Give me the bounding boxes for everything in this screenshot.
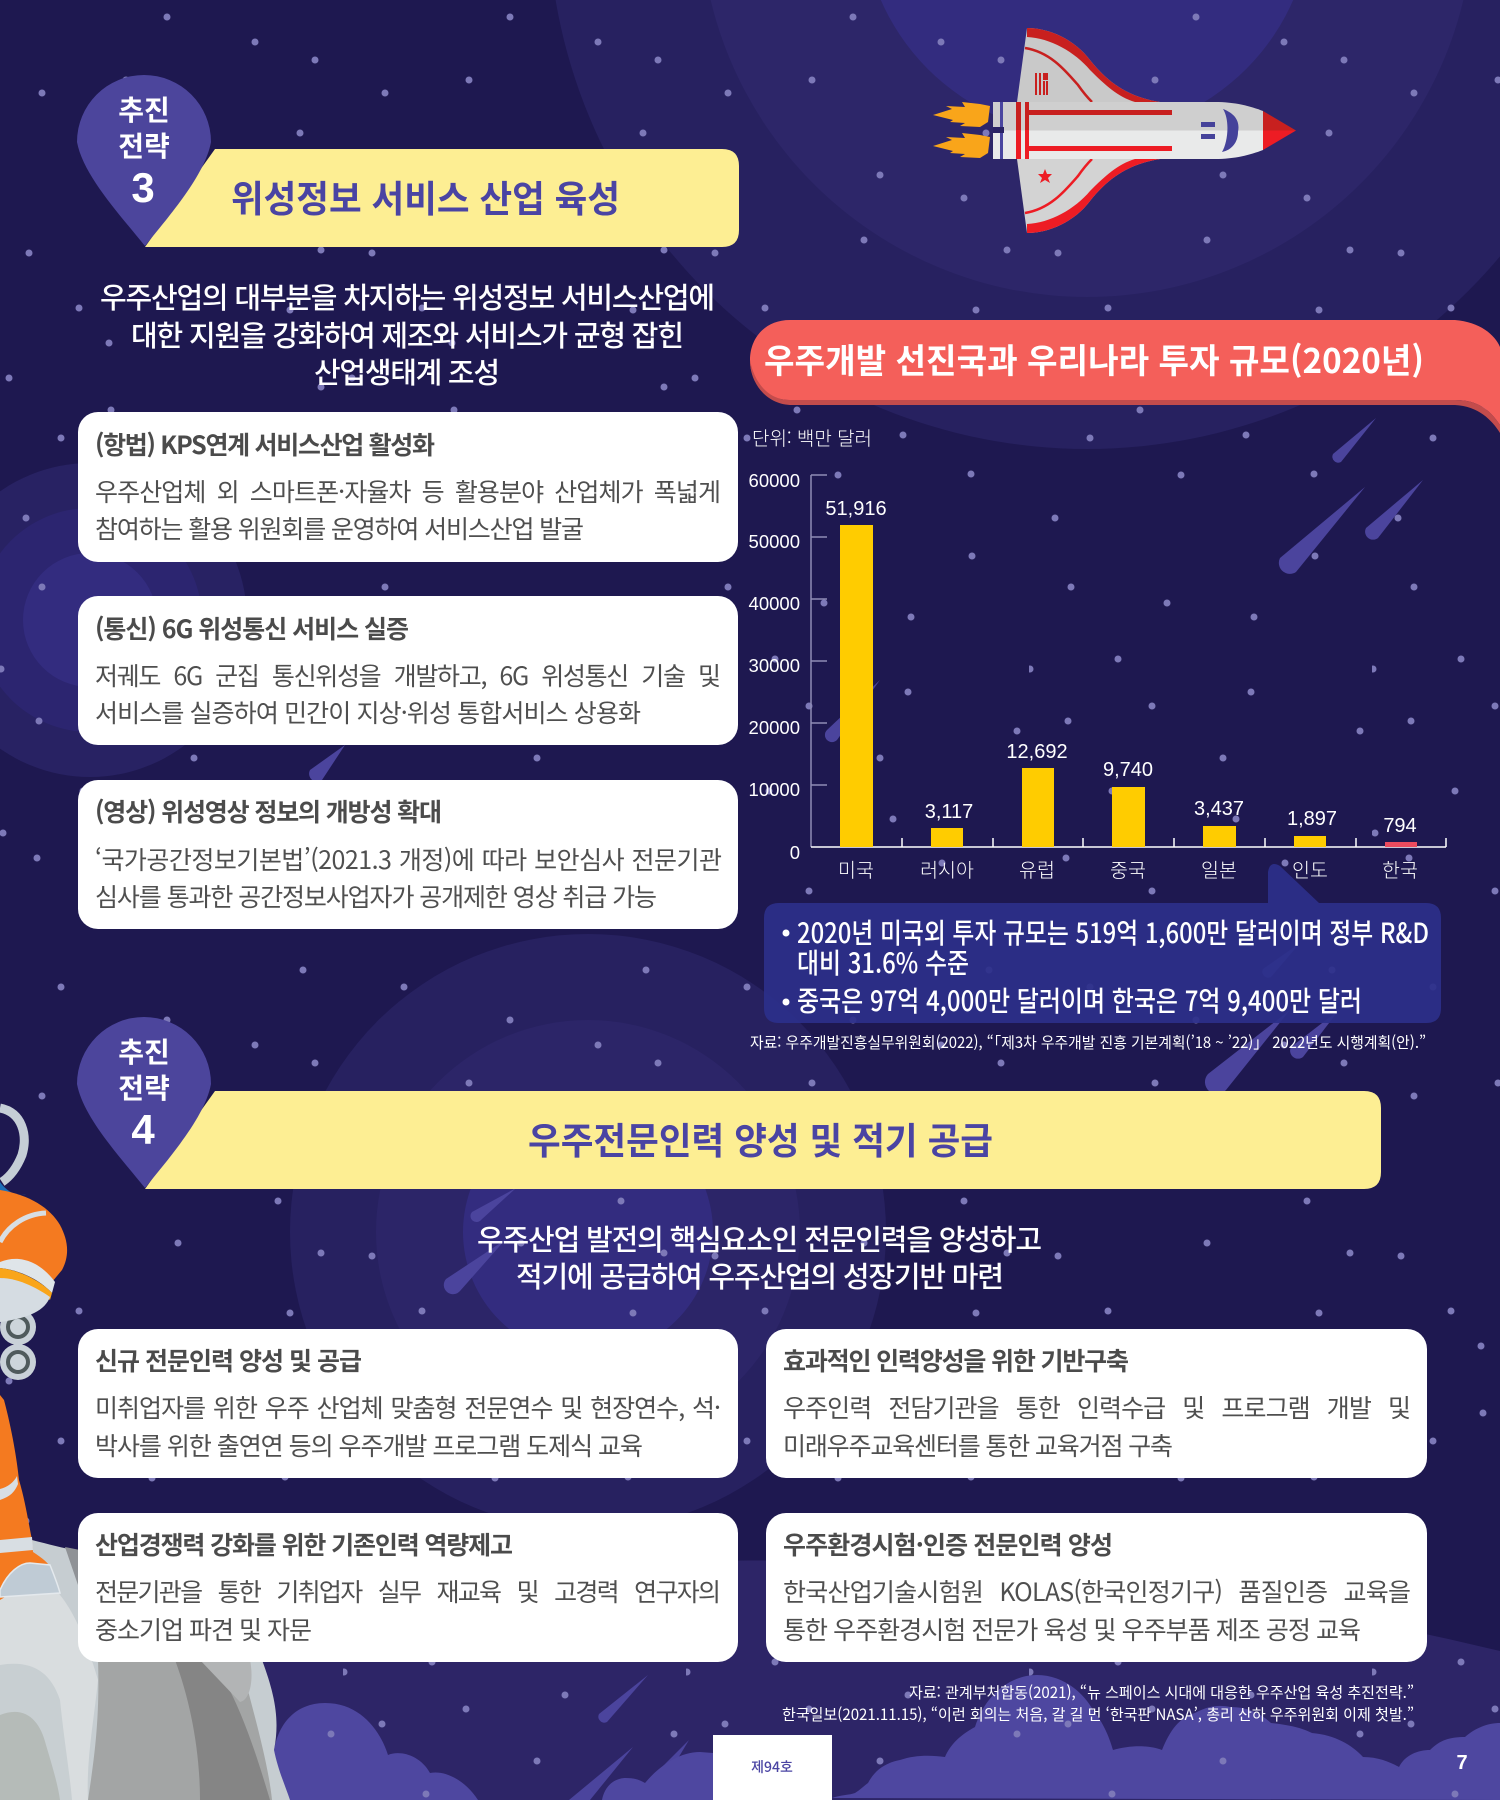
y axis labels: 40000 — [749, 593, 800, 614]
card: navigation: (항법) KPS연계 서비스산업 활성화 — [95, 426, 435, 462]
categories: 일본 — [1201, 854, 1237, 883]
investment chart banner — [750, 320, 1500, 433]
card: new talent: 미취업자를 위한 우주 산업체 맞춤형 전문연수 및 현장연수, 석· — [95, 1389, 721, 1425]
issue number tab: 제94호 — [751, 1757, 793, 1777]
values: 1,897 — [1287, 808, 1337, 830]
section 3 summary text: 우주산업의 대부분을 차지하는 위성정보 서비스산업에 — [100, 275, 715, 317]
card: imagery: (영상) 위성영상 정보의 개방성 확대 — [95, 793, 442, 829]
meteors — [309, 418, 1423, 1800]
card: existing talent: 산업경쟁력 강화를 위한 기존인력 역량제고 — [95, 1526, 513, 1562]
section 4 summary text: 우주산업 발전의 핵심요소인 전문인력을 양성하고 — [477, 1217, 1042, 1259]
card: new talent: 신규 전문인력 양성 및 공급 — [95, 1342, 362, 1378]
section 3 header — [77, 75, 739, 247]
card: infrastructure: 우주인력 전담기관을 통한 인력수급 및 프로그램 개발 및 — [783, 1389, 1411, 1425]
investment chart banner: 우주개발 선진국과 우리나라 투자 규모(2020년) — [764, 334, 1424, 383]
card: environment test: 우주환경시험·인증 전문인력 양성 — [783, 1526, 1113, 1562]
values: 9,740 — [1103, 759, 1153, 781]
section 3 summary text: 산업생태계 조성 — [314, 350, 500, 392]
values: 12,692 — [1006, 741, 1068, 763]
card: environment test: 한국산업기술시험원 KOLAS(한국인정기구) 품질인증 교육을 — [783, 1573, 1411, 1609]
card: imagery: 심사를 통과한 공간정보사업자가 공개제한 영상 취급 가능 — [95, 878, 657, 914]
strategy pin 3: 추진 — [118, 89, 170, 129]
bottom sources: 자료: 관계부처합동(2021), “뉴 스페이스 시대에 대응한 우주산업 육성 추진전략.” — [909, 1681, 1414, 1703]
chart source: 자료: 우주개발진흥실무위원회(2022), “「제3차 우주개발 진흥 기본계획(’18 ~ ’22)」 2022년도 시행계획(안).” — [750, 1031, 1426, 1053]
categories: 중국 — [1110, 854, 1146, 883]
card: communications: 저궤도 6G 군집 통신위성을 개발하고, 6G 위성통신 기술 및 — [95, 657, 721, 693]
section 3 summary text: 대한 지원을 강화하여 제조와 서비스가 균형 잡힌 — [131, 313, 684, 355]
moon surface — [0, 1535, 290, 1800]
card: communications: 서비스를 실증하여 민간이 지상·위성 통합서비스 상용화 — [95, 694, 641, 730]
strategy pin 3 — [77, 75, 211, 246]
card: infrastructure: 효과적인 인력양성을 위한 기반구축 — [783, 1342, 1129, 1378]
values — [825, 498, 1417, 837]
issue number tab — [713, 1735, 832, 1800]
title bar: satellite information services: 위성정보 서비스 산업 육성 — [231, 169, 620, 223]
bottom sources: 한국일보(2021.11.15), “이런 회의는 처음, 갈 길 먼 ‘한국판 NASA’, 총리 산하 우주위원회 이제 첫발.” — [782, 1703, 1414, 1725]
star — [1038, 169, 1052, 183]
strategy pin 3: 전략 — [118, 125, 170, 165]
section 4 summary text — [477, 1217, 1042, 1296]
y axis labels: 20000 — [749, 717, 800, 738]
astronaut — [0, 1108, 67, 1600]
title bar: workforce — [145, 1091, 1381, 1189]
callout: 중국은 97억 4,000만 달러이며 한국은 7억 9,400만 달러 — [797, 980, 1362, 1020]
section 4 summary text: 적기에 공급하여 우주산업의 성장기반 마련 — [516, 1254, 1004, 1296]
card: navigation — [78, 412, 738, 562]
card: new talent — [78, 1329, 738, 1478]
bars — [840, 525, 1326, 847]
strategy pin 4: 추진 — [118, 1031, 170, 1071]
section 4 header — [77, 1017, 1381, 1189]
y axis labels: 10000 — [749, 779, 800, 800]
flag — [1035, 73, 1048, 95]
y axis labels: 0 — [790, 842, 800, 863]
callout — [764, 864, 1441, 1023]
strategy pin 4: 4 — [131, 1106, 155, 1153]
y axis labels: 60000 — [749, 470, 800, 491]
y axis labels: 50000 — [749, 531, 800, 552]
card: imagery: ‘국가공간정보기본법’(2021.3 개정)에 따라 보안심사 전문기관 — [95, 841, 722, 877]
card: navigation: 우주산업체 외 스마트폰·자율차 등 활용분야 산업체가 폭넓게 — [95, 473, 721, 509]
values: 794 — [1383, 815, 1417, 837]
page number: 7 — [1456, 1752, 1468, 1774]
strategy pin 3: 3 — [131, 164, 155, 211]
card: communications: (통신) 6G 위성통신 서비스 실증 — [95, 610, 409, 646]
unit label: 단위: 백만 달러 — [752, 424, 872, 451]
bottom sources — [782, 1681, 1414, 1725]
card: existing talent — [78, 1513, 738, 1662]
categories: 유럽 — [1019, 854, 1055, 883]
categories: 러시아 — [920, 854, 974, 883]
card: infrastructure: 미래우주교육센터를 통한 교육거점 구축 — [783, 1427, 1173, 1463]
strategy pin 4 — [77, 1017, 211, 1188]
y axis labels: 30000 — [749, 655, 800, 676]
card: environment test: 통한 우주환경시험 전문가 육성 및 우주부품 제조 공정 교육 — [783, 1611, 1361, 1647]
axes — [811, 475, 827, 847]
fuselage — [993, 102, 1263, 130]
card: new talent: 박사를 위한 출연연 등의 우주개발 프로그램 도제식 교육 — [95, 1427, 643, 1463]
bar chart — [749, 424, 1446, 883]
categories: 인도 — [1292, 854, 1328, 883]
strategy pin 4: 전략 — [118, 1067, 170, 1107]
card: environment test — [766, 1513, 1427, 1662]
section 3 summary text — [100, 275, 715, 392]
card: infrastructure — [766, 1329, 1427, 1478]
clouds — [273, 1675, 1500, 1800]
title bar: satellite information services — [145, 149, 739, 247]
callout: 대비 31.6% 수준 — [797, 942, 969, 982]
y axis labels — [749, 470, 800, 863]
categories — [838, 854, 1418, 883]
card: imagery — [78, 780, 738, 929]
card: communications — [78, 596, 738, 745]
flames — [933, 102, 990, 158]
values: 3,117 — [925, 801, 973, 823]
title bar: workforce: 우주전문인력 양성 및 적기 공급 — [528, 1111, 993, 1165]
card: existing talent: 전문기관을 통한 기취업자 실무 재교육 및 고경력 연구자의 — [95, 1573, 721, 1609]
wings — [1017, 28, 1160, 102]
card: navigation: 참여하는 활용 위원회를 운영하여 서비스산업 발굴 — [95, 510, 584, 546]
space shuttle illustration — [933, 28, 1296, 233]
categories: 미국 — [838, 854, 874, 883]
values: 3,437 — [1194, 798, 1244, 820]
card: existing talent: 중소기업 파견 및 자문 — [95, 1611, 312, 1647]
categories: 한국 — [1382, 854, 1418, 883]
values: 51,916 — [825, 498, 887, 520]
